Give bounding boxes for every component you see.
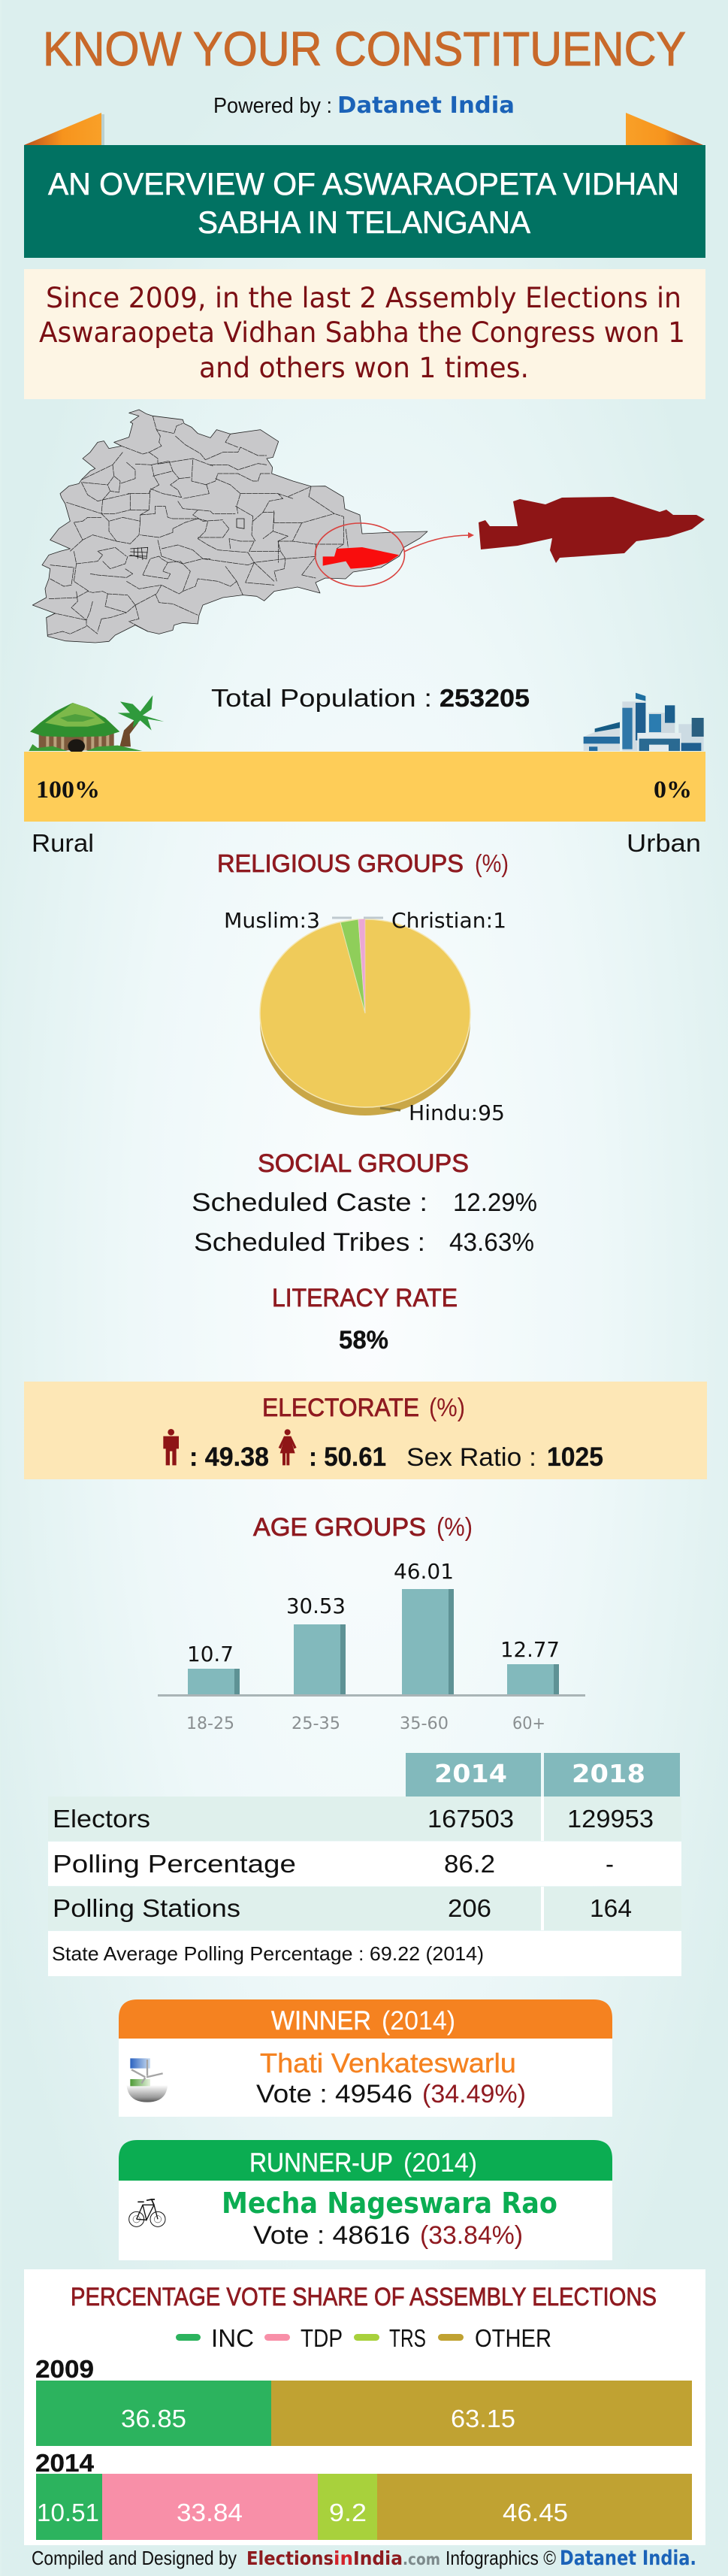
- icon: female: [279, 1429, 297, 1465]
- social groups: Scheduled Caste :: [192, 1188, 427, 1217]
- table: electors and polling: Electors: [53, 1805, 150, 1833]
- zoom circle and arrow: [316, 523, 474, 586]
- bar chart: age groups: 46.01: [394, 1559, 454, 1584]
- bar chart: age groups: 18-25: [186, 1715, 234, 1733]
- table: electors and polling: State Average Polling Percentage : 69.22 (2014): [52, 1942, 484, 1965]
- footer credits: India: [353, 2547, 403, 2569]
- bar chart: age groups: [158, 1559, 585, 1733]
- footer credits: in: [334, 2547, 353, 2569]
- constituency enlarged shape: [479, 497, 705, 563]
- social groups: [192, 1149, 537, 1257]
- rural urban bar: 100%: [36, 776, 100, 804]
- heading: age groups: (%): [436, 1513, 473, 1542]
- footer credits: Compiled and Designed by: [32, 2547, 237, 2569]
- table: electors and polling: 129953: [567, 1805, 654, 1833]
- panel: runner-up: Mecha Nageswara Rao: [222, 2187, 557, 2220]
- legend: INC: [211, 2324, 254, 2352]
- bar chart: age groups: 25-35: [292, 1715, 340, 1733]
- panel: winner: Vote : 49546: [256, 2080, 412, 2108]
- legend: OTHER: [475, 2324, 551, 2352]
- footer credits: Infographics ©: [446, 2547, 556, 2569]
- panel: electorate: ELECTORATE: [262, 1394, 419, 1422]
- total population: [211, 684, 530, 712]
- bar 2009: 2009: [35, 2355, 94, 2383]
- bar 2014: 10.51: [37, 2499, 99, 2526]
- panel: runner-up: (33.84%): [420, 2221, 523, 2250]
- pie chart: religious groups: Hindu:95: [409, 1100, 505, 1125]
- rural urban bar: [24, 752, 705, 822]
- summary panel: Since 2009, in the last 2 Assembly Elections in: [46, 282, 681, 314]
- bar chart: age groups: 35-60: [400, 1715, 449, 1733]
- bar 2009: 63.15: [451, 2405, 515, 2432]
- panel: electorate: Sex Ratio :: [406, 1443, 536, 1472]
- bar chart: age groups: 12.77: [500, 1637, 560, 1662]
- social groups: 12.29%: [453, 1188, 537, 1217]
- map of Telangana: [32, 410, 427, 643]
- literacy rate: [272, 1284, 458, 1355]
- ribbon fold left: [24, 113, 104, 145]
- footer credits: .com: [403, 2550, 440, 2568]
- legend: TDP: [301, 2324, 343, 2352]
- bar 2014: 2014: [35, 2449, 95, 2477]
- summary panel: Aswaraopeta Vidhan Sabha the Congress won 1: [39, 316, 685, 349]
- total population: Total Population :: [211, 684, 432, 712]
- social groups: Scheduled Tribes :: [194, 1228, 425, 1257]
- icon: rural hut and palm: [29, 695, 164, 753]
- table: electors and polling: 2018: [572, 1759, 645, 1788]
- panel: winner: WINNER: [271, 2006, 371, 2036]
- ribbon fold right: [626, 113, 703, 145]
- powered by line: Datanet India: [337, 92, 515, 119]
- table: electors and polling: 164: [590, 1894, 632, 1922]
- legend: [176, 2324, 551, 2352]
- table: electors and polling: 206: [448, 1894, 491, 1922]
- social groups: 43.63%: [449, 1228, 534, 1257]
- powered by line: Powered by :: [213, 94, 332, 118]
- panel: runner-up: (2014): [403, 2148, 477, 2178]
- panel: electorate: [24, 1382, 707, 1479]
- heading banner: SABHA IN TELANGANA: [198, 204, 530, 240]
- table: electors and polling: Polling Percentage: [53, 1850, 296, 1878]
- bar 2014: 46.45: [503, 2499, 568, 2526]
- footer credits: Datanet India.: [560, 2547, 696, 2570]
- rural label: Rural: [32, 829, 94, 857]
- total population: 253205: [440, 684, 530, 712]
- panel: electorate: (%): [429, 1394, 465, 1422]
- panel: electorate: : 50.61: [309, 1442, 386, 1472]
- panel: electorate: 1025: [547, 1442, 603, 1472]
- panel: winner: Thati Venkateswarlu: [260, 2048, 516, 2078]
- powered by line: [213, 92, 515, 119]
- summary panel: and others won 1 times.: [199, 352, 529, 384]
- panel: vote share chart: [24, 2269, 705, 2545]
- heading: religious groups: (%): [475, 849, 509, 877]
- highlighted constituency: [323, 547, 399, 569]
- panel: winner: (34.49%): [422, 2080, 526, 2108]
- panel: runner-up: [119, 2140, 612, 2260]
- bar chart: age groups: 30.53: [286, 1594, 346, 1618]
- bar 2014: [35, 2449, 692, 2540]
- heading banner: [24, 145, 705, 258]
- panel: runner-up: RUNNER-UP: [249, 2148, 393, 2178]
- icon: bicycle symbol: [129, 2199, 165, 2226]
- table: electors and polling: Polling Stations: [53, 1894, 240, 1922]
- table: electors and polling: 167503: [427, 1805, 514, 1833]
- bar 2014: 33.84: [177, 2499, 243, 2526]
- summary panel: [24, 269, 705, 399]
- heading: age groups: AGE GROUPS: [253, 1513, 426, 1542]
- footer credits: Elections: [246, 2547, 334, 2569]
- panel: winner: (2014): [382, 2006, 455, 2036]
- bar 2014: 9.2: [329, 2499, 367, 2526]
- bar 2009: [35, 2355, 692, 2446]
- title: KNOW YOUR CONSTITUENCY: [43, 22, 686, 76]
- bar chart: age groups: 60+: [512, 1715, 545, 1733]
- icon: ceiling fan symbol: [126, 2054, 168, 2102]
- table: electors and polling: 86.2: [444, 1850, 495, 1878]
- table: electors and polling: -: [606, 1850, 614, 1878]
- heading banner: AN OVERVIEW OF ASWARAOPETA VIDHAN: [48, 166, 679, 201]
- pie chart: religious groups: Muslim:3: [224, 908, 320, 933]
- rural urban bar: 0%: [654, 776, 692, 804]
- bar 2009: 36.85: [121, 2405, 186, 2432]
- panel: electorate: : 49.38: [189, 1442, 269, 1472]
- urban label: Urban: [627, 829, 701, 857]
- footer credits: [32, 2547, 696, 2570]
- heading: religious groups: RELIGIOUS GROUPS: [217, 849, 464, 877]
- legend: TRS: [389, 2324, 426, 2352]
- table: electors and polling: [48, 1753, 681, 1976]
- literacy rate: LITERACY RATE: [272, 1284, 458, 1312]
- panel: runner-up: Vote : 48616: [253, 2221, 410, 2250]
- pie chart: religious groups: [224, 908, 506, 1125]
- social groups: SOCIAL GROUPS: [258, 1149, 469, 1178]
- icon: male: [163, 1429, 179, 1465]
- pie chart: religious groups: Christian:1: [391, 908, 506, 933]
- icon: urban buildings: [584, 693, 704, 751]
- panel: winner: [119, 1999, 612, 2117]
- literacy rate: 58%: [339, 1326, 388, 1355]
- bar chart: age groups: 10.7: [187, 1642, 234, 1666]
- table: electors and polling: 2014: [434, 1759, 507, 1788]
